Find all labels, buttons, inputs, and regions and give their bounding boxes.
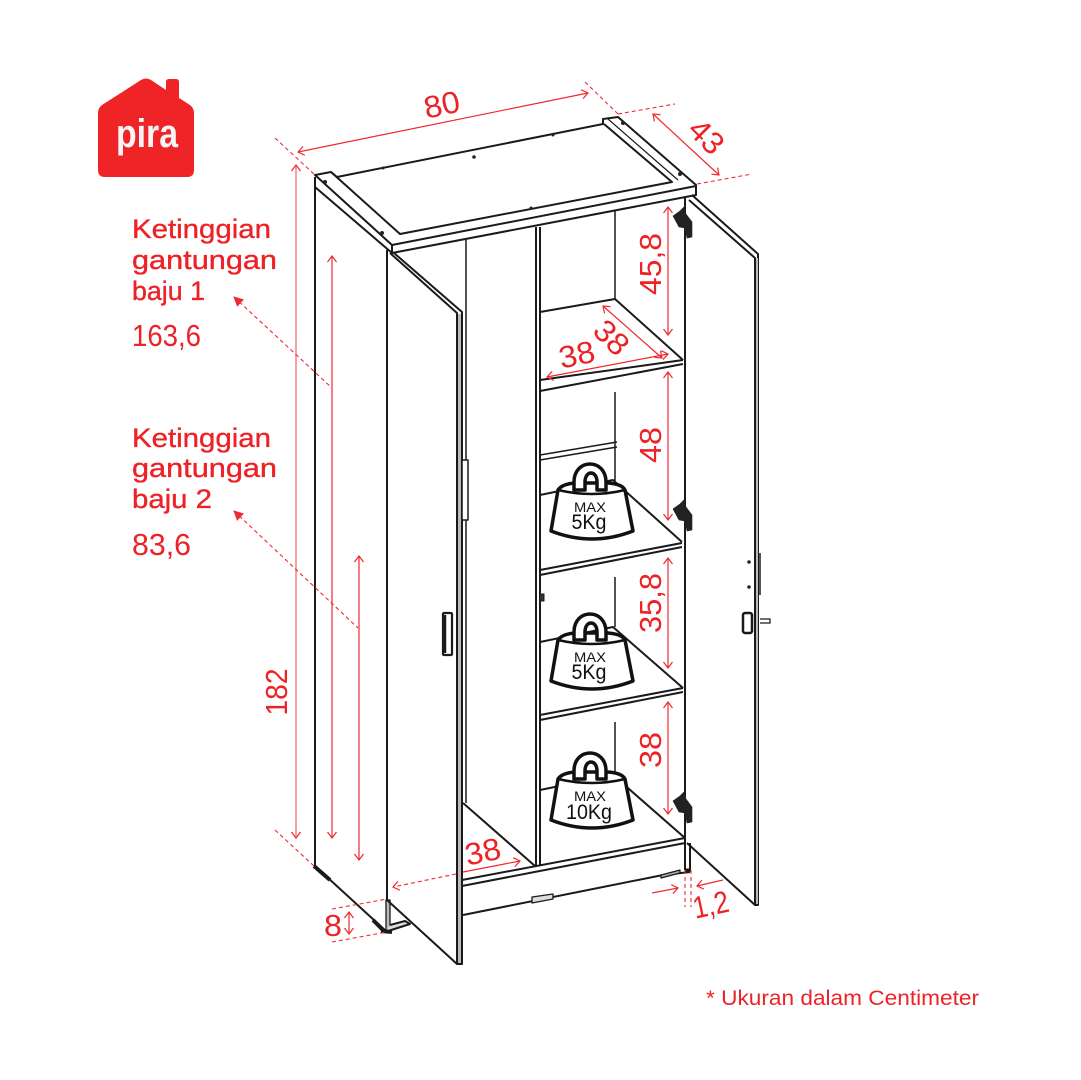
dimension: thickness 1,2: 1,2: [690, 884, 732, 926]
weight icon: max 5 kg upper: 5Kg: [572, 511, 606, 534]
label: ketinggian gantungan baju 1: [132, 214, 277, 353]
center partition and back panel: [463, 210, 615, 866]
weight icon: max 10 kg: MAX: [574, 789, 606, 804]
left side panel and feet: [314, 177, 410, 932]
dimension: height 182: 182: [259, 668, 294, 716]
hinges: [673, 207, 692, 823]
dimension: shelf heights: 48: [633, 427, 668, 463]
label: ketinggian gantungan baju 2: baju 2: [132, 484, 212, 514]
dimension: width 80: 80: [421, 84, 463, 126]
label: ketinggian gantungan baju 2: [132, 423, 277, 562]
dimension: shelf width and depth 38: 38: [586, 312, 637, 363]
dimension: height 182: [259, 165, 314, 866]
weight icon: max 10 kg: 10Kg: [566, 801, 612, 824]
dimension: feet height 8: [324, 899, 387, 943]
dimension: shelf heights: 38: [633, 732, 668, 768]
dimension: depth 43: 43: [681, 111, 732, 162]
dimension: hanging height 2 arrow: [234, 511, 359, 860]
dimension: width 80: [275, 82, 618, 175]
weight icon: max 5 kg upper: MAX: [574, 500, 606, 515]
wardrobe line drawing: [314, 117, 770, 964]
logo: pira house: pira: [116, 112, 179, 156]
weight icon: max 5 kg middle: MAX: [574, 650, 606, 665]
logo: pira house: [98, 78, 194, 177]
screws: [323, 121, 682, 235]
top panel: [315, 117, 696, 253]
dimension: shelf heights: 35,8: [633, 573, 668, 633]
dimension: shelf width and depth 38: [547, 306, 668, 377]
dimension: shelf width and depth 38: 38: [556, 334, 598, 376]
label: ketinggian gantungan baju 1: Ketinggian: [132, 214, 271, 244]
dimension: depth 43: [618, 104, 752, 184]
weight icon: max 5 kg upper: [551, 464, 633, 539]
weight icon: max 5 kg middle: 5Kg: [572, 661, 606, 684]
plinth: [462, 197, 690, 915]
dimension: thickness 1,2: [652, 870, 732, 926]
dimension: hanging height 1 arrow: [234, 256, 332, 838]
right door: [687, 195, 770, 905]
weight icon: max 10 kg: [551, 753, 633, 828]
left door: [387, 240, 468, 964]
label: ketinggian gantungan baju 1: baju 1: [132, 276, 205, 306]
dimension: bottom depth 38: 38: [462, 831, 504, 873]
dimension: shelf heights: [633, 207, 668, 814]
dimension: feet height 8: 8: [324, 908, 342, 943]
dimension: bottom depth 38: [393, 831, 520, 887]
label: ketinggian gantungan baju 1: gantungan: [132, 245, 277, 275]
shelves: [540, 299, 685, 838]
weight icon: max 5 kg middle: [551, 614, 633, 689]
label: ketinggian gantungan baju 2: 83,6: [132, 527, 191, 562]
label: ketinggian gantungan baju 2: gantungan: [132, 453, 277, 483]
label: ketinggian gantungan baju 2: Ketinggian: [132, 423, 271, 453]
dimension: shelf heights: 45,8: [633, 233, 668, 295]
footnote: * Ukuran dalam Centimeter: [706, 987, 979, 1010]
label: ketinggian gantungan baju 1: 163,6: [132, 318, 201, 353]
